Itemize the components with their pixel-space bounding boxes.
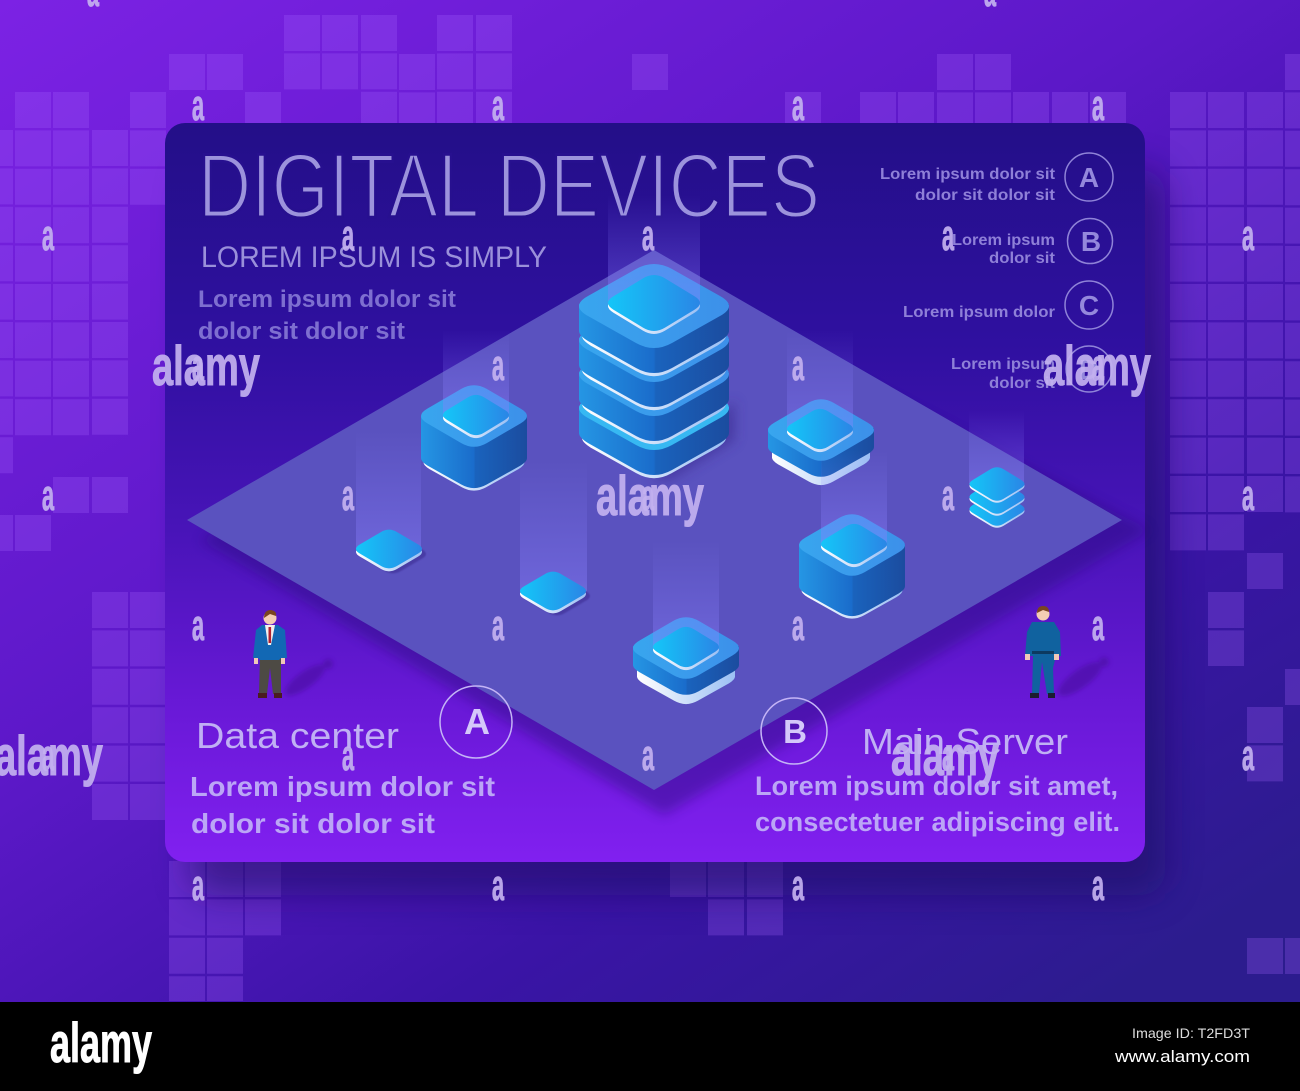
legend item D: Lorem ipsum [951,356,1055,373]
heading: Main Server [862,721,1068,762]
belt [1032,651,1054,654]
watermark logos: alamy [152,334,260,397]
marker B: B [783,713,807,750]
watermark letters: a [942,472,955,520]
intro text [198,286,456,345]
body [1025,622,1061,694]
legend item D [951,346,1112,392]
watermark letters: a [342,212,355,260]
legend item A: dolor sit dolor sit [915,187,1055,204]
title: DIGITAL DEVICES [198,136,820,237]
description: Lorem ipsum dolor sit amet, [755,771,1118,801]
device: server slab bottom [633,540,739,704]
watermark letters: a [492,342,505,390]
shoes [258,693,282,698]
watermark letters: a [1092,602,1105,650]
watermark letters: a [192,862,205,910]
description: dolor sit dolor sit [191,808,435,839]
watermark letters: a [792,342,805,390]
description: consectetuer adipiscing elit. [755,807,1120,837]
shirt and tie [265,625,275,645]
watermark letters: a [192,602,205,650]
watermark letters: a [1092,862,1105,910]
description [190,771,495,839]
device: flat pad left [356,430,426,573]
watermark letters: a [642,732,655,780]
label: data center [190,715,495,839]
watermark logos: alamy [596,464,704,527]
watermark letters: a [42,212,55,260]
watermark letters: a [942,212,955,260]
person: left man in suit [253,610,333,701]
legend item D: dolor sit [989,375,1055,392]
device: main server stack [579,195,735,480]
watermark letters: a [342,732,355,780]
watermark letters: a [942,732,955,780]
shoes [1030,693,1055,698]
watermark letters: a [1092,342,1105,390]
legend [880,153,1113,392]
legend item B: B [1081,226,1101,257]
device: small stack right [969,410,1024,528]
watermark letters: a [1242,472,1255,520]
legend item C: Lorem ipsum dolor [903,304,1055,321]
hands and head [1025,654,1059,660]
description: Lorem ipsum dolor sit [190,771,495,802]
footer logo: alamy [50,1011,152,1074]
shadow [1054,656,1109,702]
watermark logos [0,334,1151,787]
legend item A [880,153,1113,204]
intro text: Lorem ipsum dolor sit [198,286,456,313]
watermark letters: a [792,82,805,130]
card shadow [190,170,1165,895]
marker A [440,686,512,758]
footer bar [0,1002,1300,1091]
main card panel [165,123,1145,862]
watermark letters: a [1092,82,1105,130]
marker A: A [464,701,490,742]
legend item D: D [1079,354,1099,385]
person: right man in blue [1025,606,1109,702]
heading: Data center [196,715,399,756]
legs [259,655,281,694]
device: flat pad middle [520,460,590,615]
watermark letters: a [42,472,55,520]
description [755,771,1120,837]
legend item C [903,281,1113,329]
watermark letters: a [1242,732,1255,780]
watermark letters: a [42,732,55,780]
hands and head [254,658,285,664]
watermark letters: a [642,212,655,260]
watermark letters: a [342,472,355,520]
isometric platform [187,250,1150,815]
legend item B [952,218,1112,267]
watermark letters: a [192,82,205,130]
legend item C: C [1079,290,1099,321]
website: www.alamy.com [1114,1047,1250,1066]
device: server cube left [421,330,527,491]
watermark letters: a [492,602,505,650]
legend item B: Lorem ipsum [952,232,1055,249]
legend item B: dolor sit [989,250,1055,267]
image id: Image ID: T2FD3T [1132,1025,1250,1041]
watermark letters [42,0,1255,910]
watermark letters: a [792,602,805,650]
watermark letters: a [792,862,805,910]
watermark letters: a [642,472,655,520]
watermark letters: a [492,82,505,130]
intro text: dolor sit dolor sit [198,318,405,345]
marker B [761,698,827,764]
watermark logos: alamy [1043,334,1151,397]
watermark letters: a [192,342,205,390]
label: main server [755,721,1120,837]
device: server cube right [799,450,905,619]
watermark letters: a [1242,212,1255,260]
legend item A: Lorem ipsum dolor sit [880,166,1055,183]
watermark letters: a [492,862,505,910]
watermark logos: alamy [891,724,999,787]
subtitle: LOREM IPSUM IS SIMPLY [201,241,547,274]
device: server slab right [768,330,874,485]
jacket [253,625,287,660]
legend item A: A [1079,162,1099,193]
shadow [281,659,333,701]
